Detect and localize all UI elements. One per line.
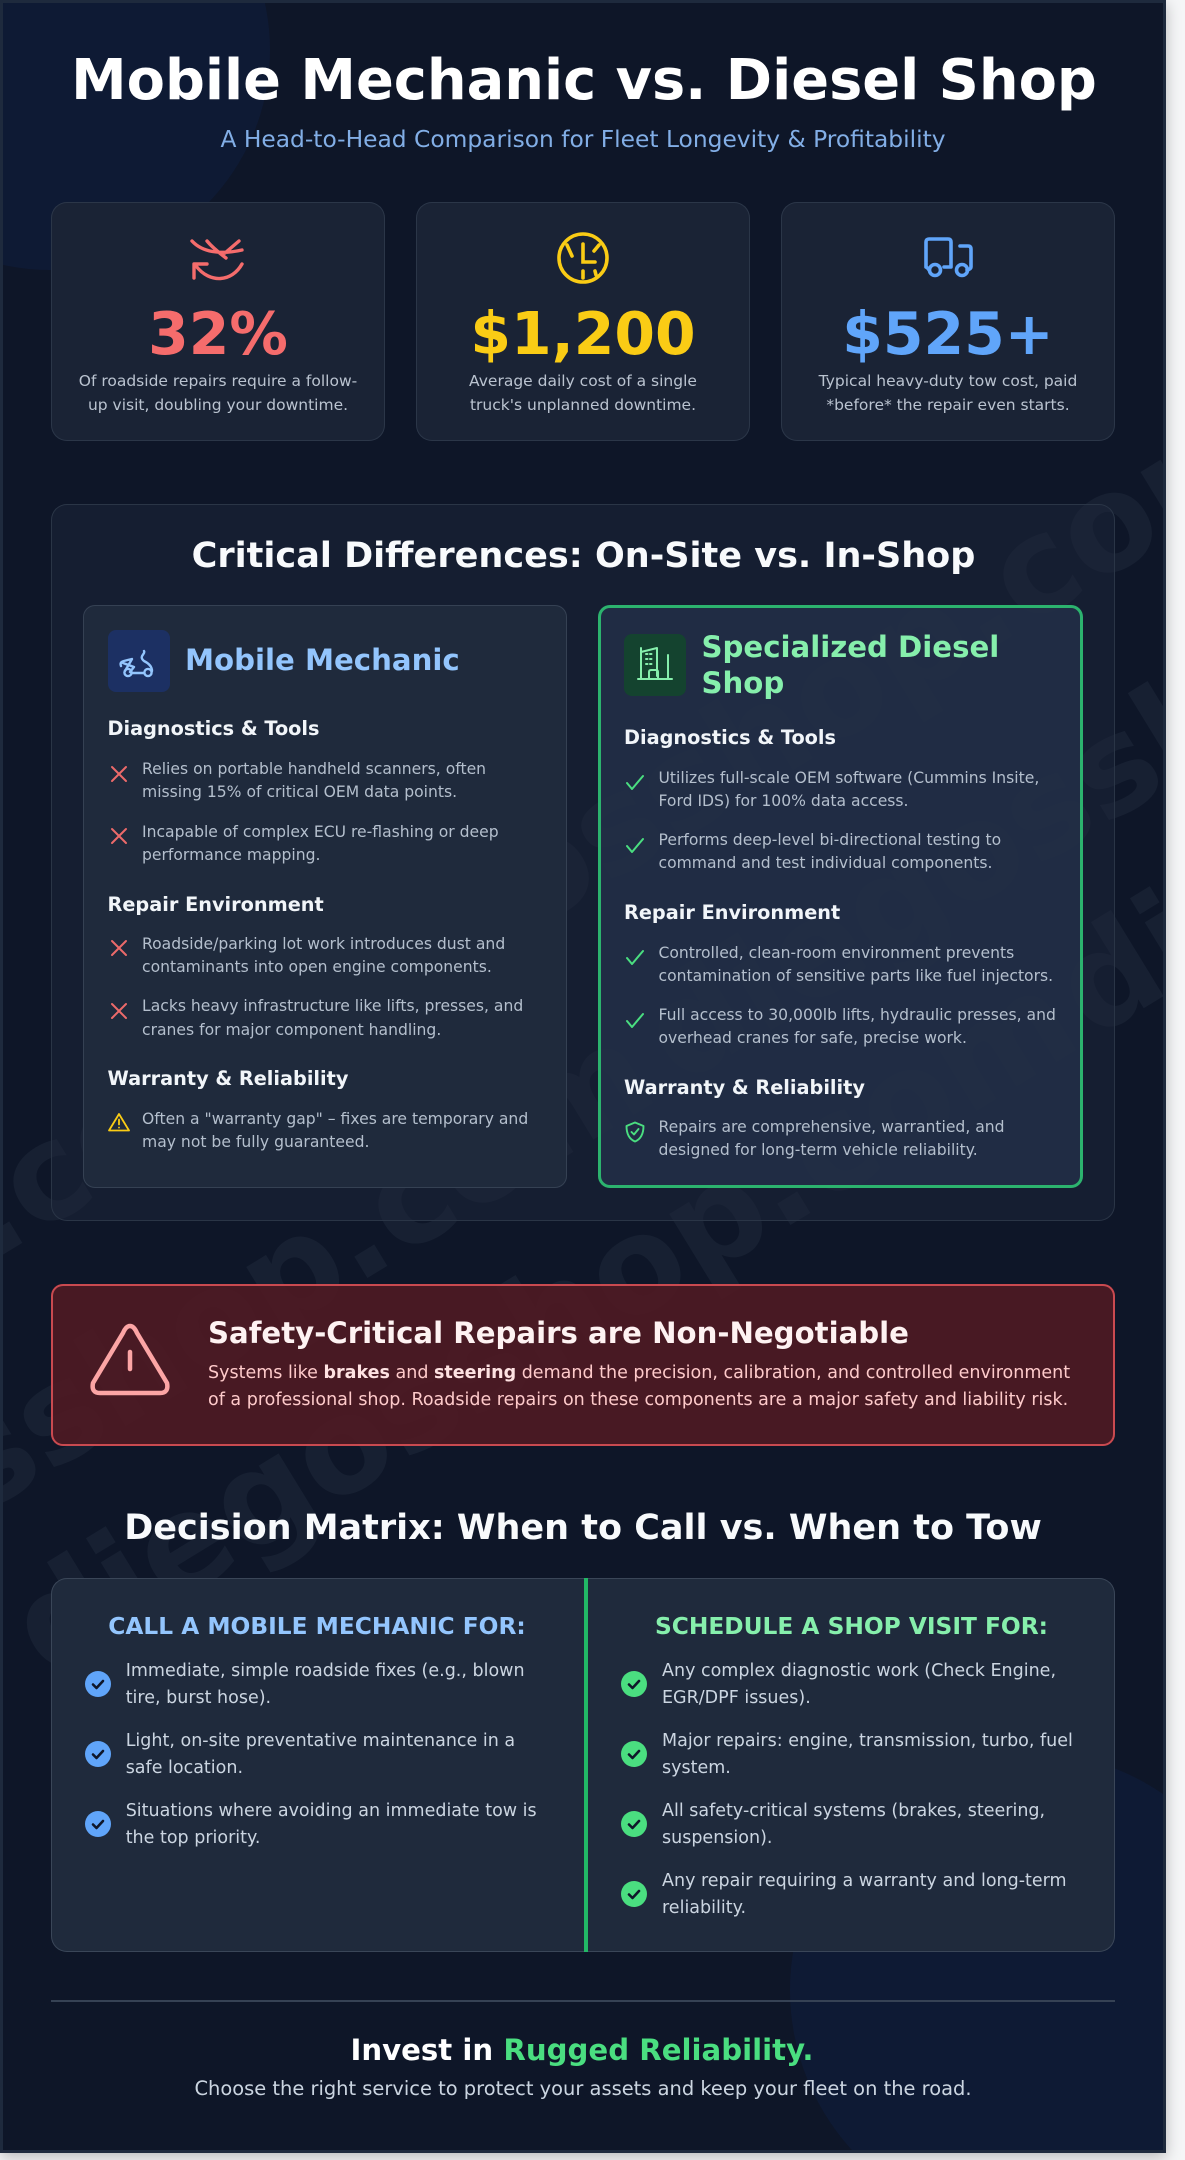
divider xyxy=(584,1578,588,1952)
list text: Full access to 30,000lb lifts, hydraulic presses, and xyxy=(658,1006,1056,1024)
stat label xyxy=(469,372,697,414)
list text xyxy=(662,1731,1073,1778)
panel: critical differences xyxy=(51,504,1115,1221)
list text: Repairs are comprehensive, warrantied, and xyxy=(658,1118,1005,1136)
callout heading: Safety-Critical Repairs are Non-Negotiable xyxy=(208,1316,909,1350)
list text: Often a "warranty gap" – fixes are temporary and xyxy=(142,1110,528,1128)
list text: may not be fully guaranteed. xyxy=(142,1133,369,1151)
panel: mobile mechanic xyxy=(83,605,567,1188)
list text: EGR/DPF issues). xyxy=(662,1688,811,1708)
icon: warning triangle xyxy=(90,1324,170,1396)
panel: specialized diesel shop xyxy=(598,605,1083,1188)
list text xyxy=(658,769,1039,810)
icon: green check xyxy=(621,1811,647,1837)
stat label: Of roadside repairs require a follow- xyxy=(79,372,357,390)
list text xyxy=(658,944,1053,985)
list text: missing 15% of critical OEM data points. xyxy=(142,783,457,801)
icon: warning xyxy=(108,1113,130,1132)
list text: contaminants into open engine components. xyxy=(142,958,492,976)
list text: overhead cranes for safe, precise work. xyxy=(658,1029,967,1047)
list text xyxy=(142,935,505,976)
icon: check xyxy=(626,838,644,853)
list text xyxy=(126,1731,515,1778)
section heading: Critical Differences: On-Site vs. In-Shop xyxy=(192,535,975,576)
list text: Roadside/parking lot work introduces dust and xyxy=(142,935,505,953)
list text: suspension). xyxy=(662,1828,772,1848)
stat label: *before* the repair even starts. xyxy=(826,396,1070,414)
list text xyxy=(658,1006,1056,1047)
list text: Performs deep-level bi-directional testing to xyxy=(658,831,1001,849)
list text: Utilizes full-scale OEM software (Cummins Insite, xyxy=(658,769,1039,787)
list text xyxy=(658,1118,1005,1159)
icon: green check xyxy=(621,1671,647,1697)
list text: Any complex diagnostic work (Check Engine, xyxy=(662,1661,1056,1681)
stat label: Typical heavy-duty tow cost, paid xyxy=(819,372,1077,390)
list text: Light, on-site preventative maintenance in a xyxy=(126,1731,515,1751)
stat value: $1,200 xyxy=(470,300,696,368)
icon: cross xyxy=(111,766,127,782)
icon: clock xyxy=(557,232,609,284)
stat label: truck's unplanned downtime. xyxy=(470,396,696,414)
list text: the top priority. xyxy=(126,1828,260,1848)
stat value: $525+ xyxy=(842,300,1054,368)
stat label: Average daily cost of a single xyxy=(469,372,697,390)
icon: cross xyxy=(111,828,127,844)
list text: Lacks heavy infrastructure like lifts, presses, and xyxy=(142,997,523,1015)
callout text: Systems like brakes and steering demand the precision, calibration, and controlled environment xyxy=(208,1362,1070,1382)
icon: cross xyxy=(111,1003,127,1019)
heading: specialized diesel shop xyxy=(702,630,999,700)
list text: contamination of sensitive parts like fuel injectors. xyxy=(658,967,1053,985)
icon: shop building xyxy=(624,634,686,696)
list text xyxy=(142,997,523,1039)
list text xyxy=(142,760,486,801)
list text: Major repairs: engine, transmission, turbo, fuel xyxy=(662,1731,1073,1751)
list text: Situations where avoiding an immediate tow is xyxy=(126,1801,537,1821)
list text: performance mapping. xyxy=(142,846,320,864)
icon: check xyxy=(626,775,644,790)
icon: green check xyxy=(621,1741,647,1767)
column heading: mobile: CALL A MOBILE MECHANIC FOR: xyxy=(108,1612,526,1640)
list text xyxy=(142,1110,528,1151)
section heading: decision matrix: Decision Matrix: When to Call vs. When to Tow xyxy=(124,1508,1042,1548)
list text: All safety-critical systems (brakes, steering, xyxy=(662,1801,1045,1821)
icon: truck xyxy=(924,237,973,278)
list text xyxy=(658,831,1001,872)
callout text xyxy=(208,1362,1070,1410)
subheading: Warranty & Reliability xyxy=(108,1067,348,1090)
stat label xyxy=(79,372,357,414)
icon: blue check xyxy=(85,1671,111,1697)
list text: Controlled, clean-room environment prevents xyxy=(658,944,1014,962)
callout text: of a professional shop. Roadside repairs on these components are a major safety and liability risk. xyxy=(208,1390,1068,1410)
icon: check xyxy=(626,950,644,965)
list text: cranes for major component handling. xyxy=(142,1021,441,1039)
heading: mobile mechanic: Mobile Mechanic xyxy=(185,643,460,677)
list text: system. xyxy=(662,1758,731,1778)
icon: cross xyxy=(111,940,127,956)
list text: Any repair requiring a warranty and long-term xyxy=(662,1871,1067,1891)
list text xyxy=(126,1661,525,1708)
decorative blue circle bottom right xyxy=(790,1752,1185,2160)
stat card: follow-up visits xyxy=(51,202,385,441)
footer text: Choose the right service to protect your assets and keep your fleet on the road. xyxy=(194,2077,972,2100)
heading: specialized diesel shop: Specialized Diesel xyxy=(702,630,999,664)
icon: check xyxy=(626,1013,644,1028)
list text xyxy=(662,1661,1056,1708)
list text xyxy=(142,823,499,864)
callout: safety-critical repairs xyxy=(51,1284,1115,1446)
subheading: Repair Environment xyxy=(108,893,324,916)
list text: tire, burst hose). xyxy=(126,1688,271,1708)
icon: green check xyxy=(621,1881,647,1907)
subheading: Diagnostics & Tools xyxy=(108,717,320,740)
footer headline: Invest in Rugged Reliability. xyxy=(350,2033,814,2067)
subheading: Warranty & Reliability xyxy=(624,1076,865,1099)
list text: command and test individual components. xyxy=(658,854,992,872)
heading: specialized diesel shop: Shop xyxy=(702,666,784,700)
column heading: shop: SCHEDULE A SHOP VISIT FOR: xyxy=(655,1612,1048,1640)
icon: shield check xyxy=(626,1122,644,1142)
stat card: downtime cost xyxy=(416,202,750,441)
list text xyxy=(662,1868,1067,1922)
list text: Ford IDS) for 100% data access. xyxy=(658,792,909,810)
list text: Immediate, simple roadside fixes (e.g., blown xyxy=(126,1661,525,1681)
icon: blue check xyxy=(85,1811,111,1837)
stat label: up visit, doubling your downtime. xyxy=(88,396,348,414)
list text xyxy=(126,1801,537,1848)
stat value: 32% xyxy=(148,300,288,368)
decorative blue circle top left xyxy=(0,0,270,270)
icon: blue check xyxy=(85,1741,111,1767)
title: Mobile Mechanic vs. Diesel Shop xyxy=(71,48,1097,113)
subtitle: A Head-to-Head Comparison for Fleet Longevity & Profitability xyxy=(220,125,946,153)
list text: safe location. xyxy=(126,1758,243,1778)
list text: reliability. xyxy=(662,1898,746,1918)
stat label xyxy=(818,372,1077,414)
subheading: Diagnostics & Tools xyxy=(624,726,836,748)
icon: mobile scooter xyxy=(108,630,170,692)
list text: designed for long-term vehicle reliability. xyxy=(658,1141,978,1159)
watermark: diegosshop.com xyxy=(0,940,1102,1707)
list text xyxy=(662,1798,1045,1852)
list text: Incapable of complex ECU re-flashing or deep xyxy=(142,823,499,841)
stat card: tow cost xyxy=(781,202,1115,441)
list text: Relies on portable handheld scanners, often xyxy=(142,760,486,778)
panel: decision matrix xyxy=(51,1578,1115,1952)
icon: repeat repair arrows xyxy=(190,239,244,280)
subheading: Repair Environment xyxy=(624,901,840,924)
